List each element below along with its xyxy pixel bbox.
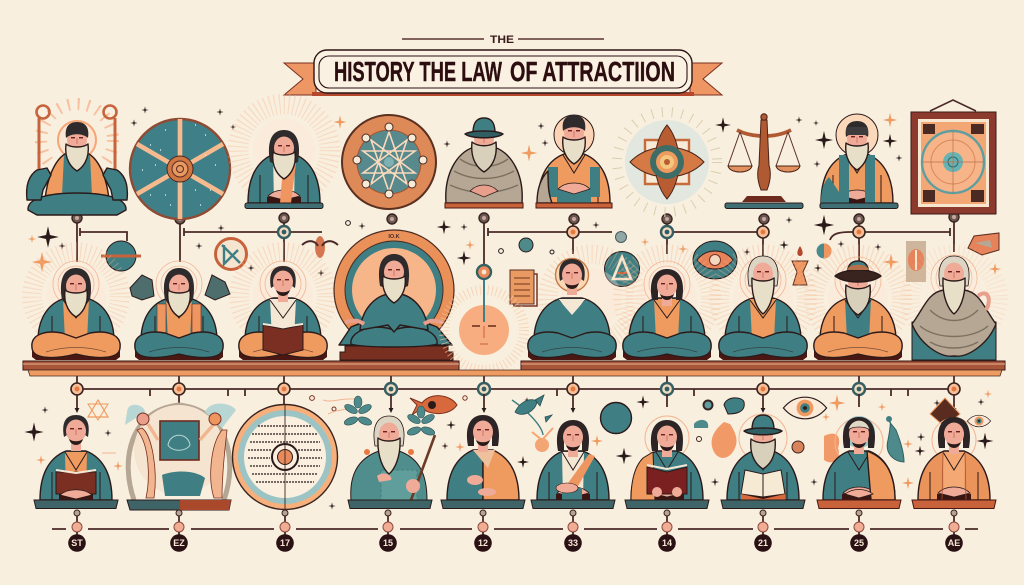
middle row arch sage: IO.K [388,234,400,240]
icon: round sign [216,238,246,270]
marker: 15: 15 [383,538,393,548]
marker: 33: 33 [568,538,578,548]
bottom figure 6 stole [531,420,615,508]
bottom figure 4 white sage with staff [343,396,436,508]
icon: triangle [88,400,108,420]
title [284,34,722,96]
main timeline beam [23,361,1005,376]
marker: AE [945,510,963,552]
icon: diamond [930,398,960,427]
marker: 21 [754,510,772,552]
top row wheel [130,119,230,219]
top row scales [725,114,803,208]
marker: 15 [379,510,397,552]
icon: book [510,270,537,306]
top row framed chart [911,100,996,214]
icon: small ball [519,232,626,252]
icon: teal blob [694,398,744,428]
middle row arch sage [334,230,454,360]
top row star circle [342,115,436,209]
marker: 25 [850,510,868,552]
icon: wave lines [102,399,362,453]
top row man with halo [536,115,612,208]
ribbon tails [284,63,722,96]
top row mandala [617,112,717,212]
icon: small ring [696,400,712,442]
icon: card [906,241,926,282]
bottom figure 2 arch pair [125,404,236,510]
timeline connectors: top [77,217,954,262]
middle row seated reader [239,252,327,360]
overline: the: THE [490,34,514,46]
icon: planet [101,241,141,271]
title banner [314,50,692,93]
bottom figure 9 teal orange robe [817,416,901,508]
icon: orange swirl [712,422,839,462]
bottom figure 5 two tone robe [441,415,525,508]
icon: eye medallion [693,241,737,279]
bottom figure 10 orange robe [912,417,996,508]
icon: eye 2 [967,415,991,427]
marker: 17: 17 [280,538,290,548]
timeline nodes: top [72,212,959,238]
marker: 33 [564,510,582,552]
middle row seated sage 2 [135,261,223,360]
marker: ST: ST [71,538,83,548]
marker: EZ [170,510,188,552]
middle row seated youth 1 [528,254,636,360]
top row man with aura [238,104,330,208]
marker: 12: 12 [478,538,488,548]
bottom dashed date line [52,528,978,530]
marker: AE: AE [948,538,960,548]
title banner: HISTORY THE LAW [334,56,502,87]
bottom figure 8 hat reader [721,414,805,508]
icon: plant [512,395,553,452]
sparkles [24,106,993,510]
icon: insect [302,236,338,258]
icon: brown ball [792,441,804,453]
middle row small icons [101,221,999,306]
icon: big ball [600,402,632,434]
icon: rocks [130,275,230,300]
icon: ball [816,244,832,258]
title banner: OF ATTRACTIION [510,56,675,87]
marker: 14 [658,510,676,552]
sun face [444,290,524,370]
bottom figure 1 reader [34,415,118,508]
marker: 21: 21 [758,538,768,548]
icon: teal statue [886,416,904,462]
top row man with goggles [820,114,898,208]
marker: 14: 14 [662,538,672,548]
middle row seated sage 1 [32,252,120,360]
icon: a badge [604,252,640,286]
icon: fish [410,396,457,415]
lower timeline nodes [71,383,960,413]
middle row seated youth 2 [623,254,711,360]
icon: dark ring ornaments [346,221,554,254]
top row sage with staffs [27,104,127,215]
icon: box [968,233,999,255]
date markers [68,510,963,552]
marker: 25: 25 [854,538,864,548]
sun connector [477,262,491,322]
icon: eye 1 [783,397,827,419]
middle row seated wide hat [814,254,902,360]
middle row seated white beard [719,254,807,360]
top row hooded sage [445,118,523,208]
bottom figure 7 reader [625,416,709,508]
marker: ST [68,510,86,552]
bottom figure 3 text disc [232,404,338,510]
icon: goblet [792,246,808,285]
lower timeline line [77,376,954,396]
marker: EZ: EZ [173,538,185,548]
marker: 12 [474,510,492,552]
marker: 17 [276,510,294,552]
icon: rings [310,396,467,411]
bottom row icons [88,395,991,462]
middle row seated shawl [910,254,998,360]
